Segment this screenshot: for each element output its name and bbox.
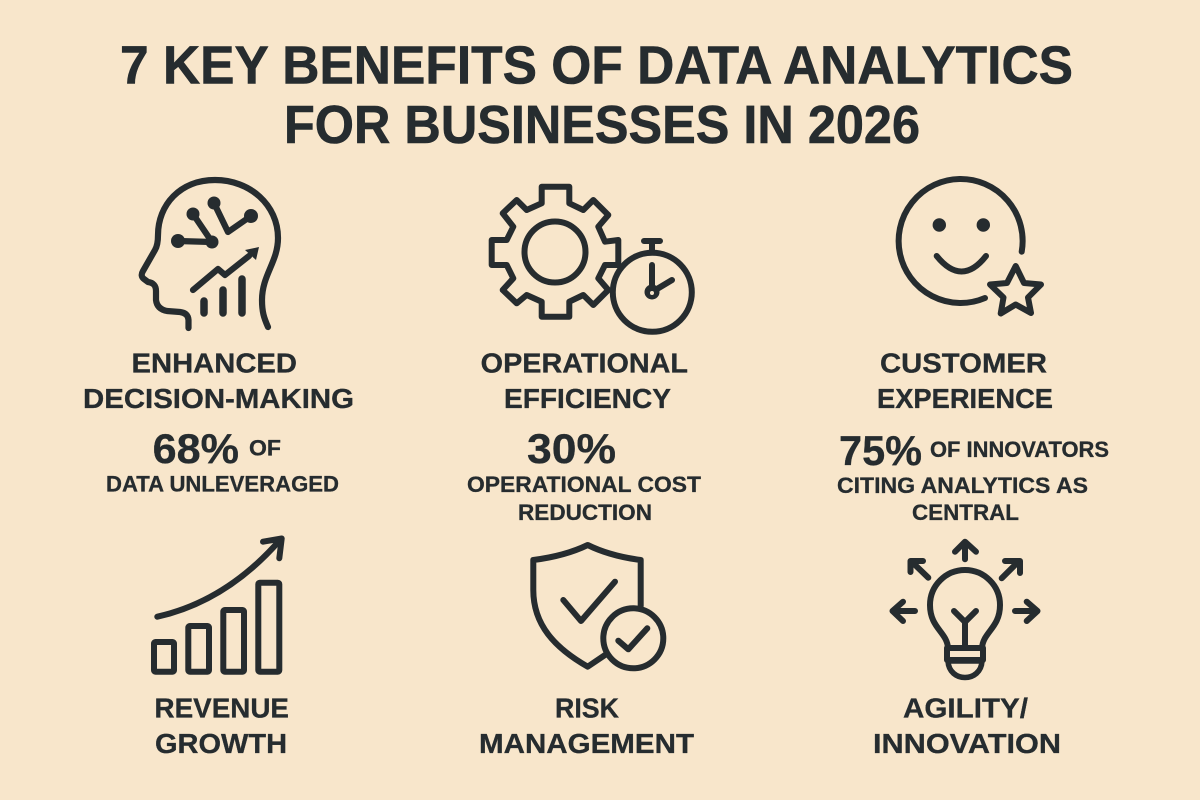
heading: customer experience: EXPERIENCE	[877, 383, 1053, 414]
stat: 75% of innovators citing analytics as central: OF INNOVATORS	[930, 437, 1109, 462]
title	[120, 35, 1073, 155]
heading: customer experience	[877, 348, 1053, 414]
heading: revenue growth	[154, 693, 289, 759]
heading: risk management: MANAGEMENT	[479, 728, 694, 759]
panel: operational efficiency	[467, 187, 702, 525]
panel: enhanced decision-making	[83, 180, 354, 497]
heading: agility and innovation: AGILITY/	[903, 693, 1028, 724]
icon: head with data nodes and chart	[142, 180, 278, 328]
heading: operational efficiency: OPERATIONAL	[481, 348, 688, 379]
panel: agility and innovation	[873, 542, 1061, 759]
heading: risk management: RISK	[555, 693, 619, 724]
stat: 75% of innovators citing analytics as central: 75%	[839, 427, 922, 474]
icon: light bulb with arrows	[892, 542, 1038, 678]
stat: 68% of data unleveraged: 68%	[153, 425, 239, 472]
heading: risk management	[479, 693, 694, 759]
heading: customer experience: CUSTOMER	[880, 348, 1047, 379]
stat: 30% operational cost reduction: REDUCTION	[518, 500, 652, 525]
icon: smiley with star	[899, 179, 1041, 314]
stat: 30% operational cost reduction: OPERATIONAL COST	[467, 472, 702, 497]
panel: revenue growth	[154, 538, 289, 759]
stat: 75% of innovators citing analytics as central: CENTRAL	[912, 500, 1019, 525]
title: 7 KEY BENEFITS OF DATA ANALYTICS	[120, 35, 1073, 95]
panel: risk management	[479, 545, 694, 759]
heading: operational efficiency: EFFICIENCY	[504, 383, 671, 414]
stat: 75% of innovators citing analytics as central	[837, 427, 1109, 525]
heading: revenue growth: GROWTH	[155, 728, 287, 759]
heading: enhanced decision-making: DECISION-MAKING	[83, 383, 354, 414]
stat: 75% of innovators citing analytics as central: CITING ANALYTICS AS	[837, 473, 1088, 498]
title: FOR BUSINESSES IN 2026	[284, 95, 920, 155]
icon: shield with check badge	[533, 545, 663, 668]
stat: 68% of data unleveraged: DATA UNLEVERAGED	[106, 472, 339, 497]
stat: 30% operational cost reduction	[467, 425, 702, 525]
icon: gear and stopwatch	[492, 187, 692, 332]
stat: 68% of data unleveraged: OF	[249, 436, 281, 461]
heading: enhanced decision-making	[83, 348, 354, 414]
stat: 30% operational cost reduction: 30%	[527, 425, 616, 472]
heading: agility and innovation	[873, 693, 1061, 759]
stat: 68% of data unleveraged	[106, 425, 339, 497]
heading: operational efficiency	[481, 348, 688, 414]
icon: bar chart with rising arrow	[154, 538, 282, 672]
heading: agility and innovation: INNOVATION	[873, 728, 1061, 759]
heading: revenue growth: REVENUE	[154, 693, 289, 724]
panel: customer experience	[837, 179, 1109, 525]
heading: enhanced decision-making: ENHANCED	[132, 348, 297, 379]
